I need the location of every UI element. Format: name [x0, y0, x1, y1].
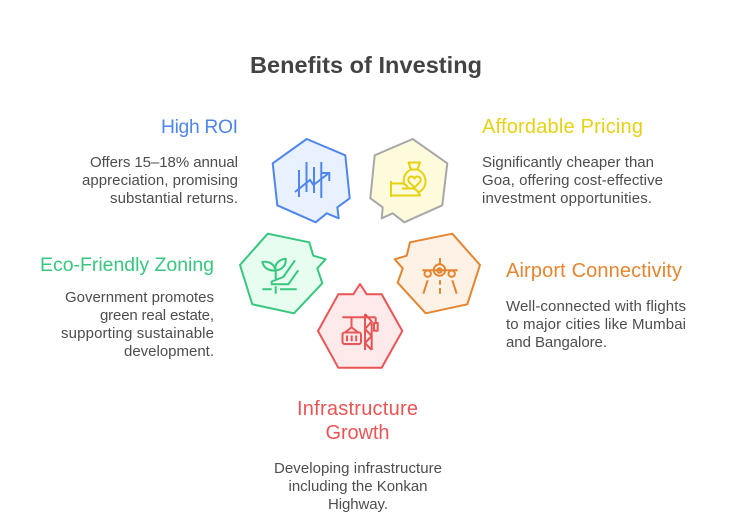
- heading: High ROI: High ROI: [161, 117, 238, 138]
- description: High ROI: [82, 154, 238, 207]
- icon: construction crane with container: [342, 314, 378, 350]
- icon: chart with rising arrow: [295, 162, 329, 198]
- description: Airport Connectivity: and Bangalore.: [506, 334, 607, 351]
- description: Eco-Friendly Zoning: green real estate,: [100, 307, 214, 324]
- description: Eco-Friendly Zoning: supporting sustainable: [61, 325, 214, 342]
- description: High ROI: substantial returns.: [110, 190, 238, 207]
- icon: hand holding money bag with heart: [391, 162, 426, 197]
- description: Eco-Friendly Zoning: development.: [124, 343, 214, 360]
- panel: airport connectivity hexagon: [395, 234, 480, 313]
- icon: plant on hand: [262, 259, 298, 294]
- description: Affordable Pricing: Significantly cheaper than: [482, 154, 654, 171]
- text block: Affordable Pricing: [482, 116, 663, 207]
- heading: Affordable Pricing: Affordable Pricing: [482, 116, 643, 138]
- description: Eco-Friendly Zoning: [61, 289, 214, 360]
- description: Infrastructure Growth: Developing infrastructure: [274, 460, 442, 477]
- description: High ROI: Offers 15–18% annual: [90, 154, 238, 171]
- text block: Infrastructure Growth: [274, 398, 442, 513]
- icon: airplane on runway: [422, 258, 458, 294]
- description: Eco-Friendly Zoning: Government promotes: [65, 289, 214, 306]
- title: Benefits of Investing: [250, 52, 482, 78]
- description: High ROI: appreciation, promising: [82, 172, 238, 189]
- text block: Airport Connectivity: [506, 260, 686, 351]
- description: Infrastructure Growth: including the Konkan: [288, 478, 428, 495]
- description: Infrastructure Growth: Highway.: [328, 496, 388, 513]
- description: Affordable Pricing: [482, 154, 663, 207]
- panel: high ROI hexagon: [273, 139, 350, 222]
- description: Airport Connectivity: to major cities like Mumbai: [506, 316, 686, 333]
- panel: eco-friendly zoning hexagon: [240, 234, 326, 313]
- description: Affordable Pricing: investment opportunities.: [482, 190, 652, 207]
- heading: Airport Connectivity: Airport Connectivity: [506, 260, 682, 282]
- heading: Infrastructure Growth: Infrastructure: [297, 398, 418, 420]
- panel: infrastructure growth hexagon: [318, 284, 402, 368]
- text block: Eco-Friendly Zoning: [40, 254, 214, 360]
- heading: Eco-Friendly Zoning: Eco-Friendly Zoning: [40, 254, 214, 276]
- description: Affordable Pricing: Goa, offering cost-effective: [482, 172, 663, 189]
- panel: affordable pricing hexagon: [370, 139, 447, 222]
- heading: Infrastructure Growth: Growth: [326, 422, 390, 444]
- description: Infrastructure Growth: [274, 460, 442, 513]
- description: Airport Connectivity: [506, 298, 686, 351]
- heading: Infrastructure Growth: [297, 398, 418, 444]
- text block: High ROI: [82, 117, 238, 207]
- description: Airport Connectivity: Well-connected with flights: [506, 298, 686, 315]
